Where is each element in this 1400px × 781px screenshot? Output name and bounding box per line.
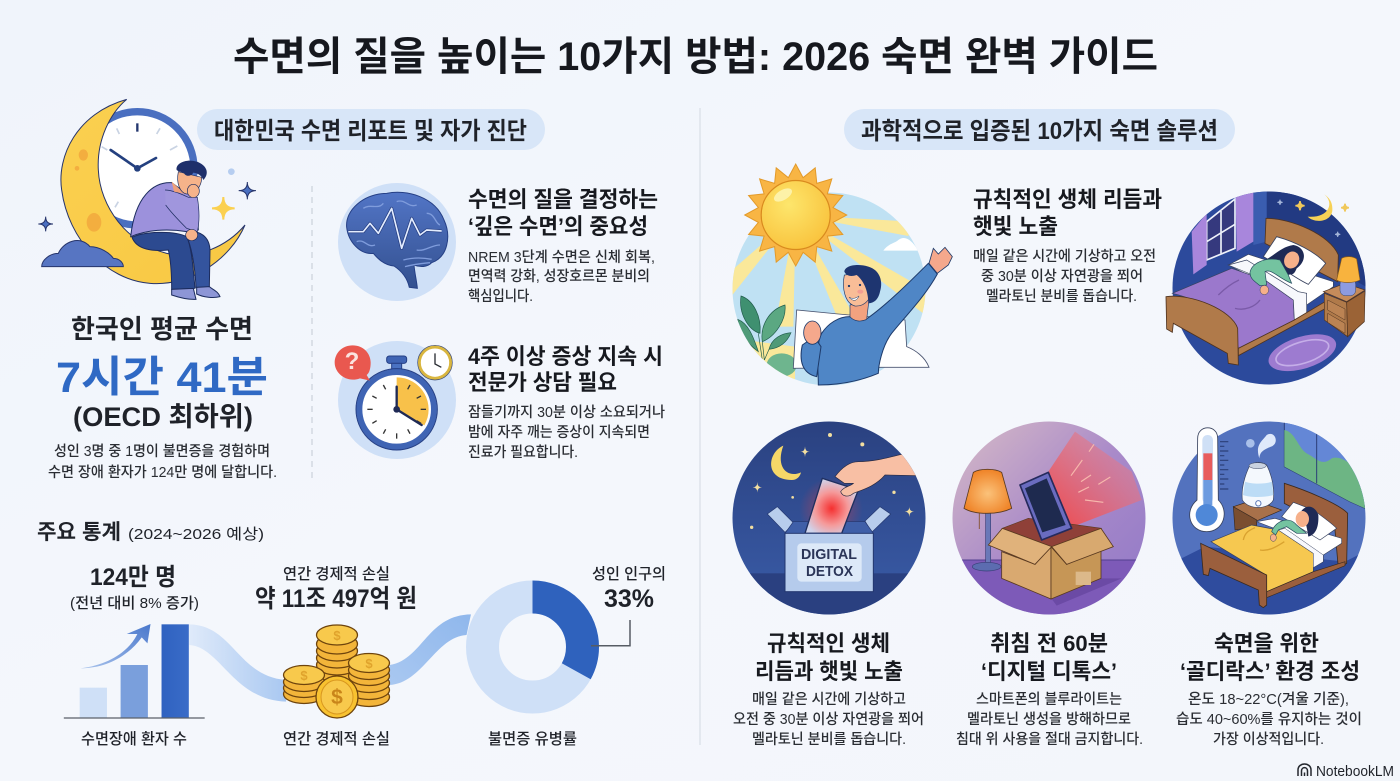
text block: 깊은 수면의 중요성: 수면의 질을 결정하는 <box>468 187 658 212</box>
icon: stacks of gold coins with loss figures: 약 11조 497억 원 <box>255 585 417 613</box>
text block: 골디락스 환경 조성: 습도 40~60%를 유지하는 것이 <box>1176 711 1362 728</box>
connector ribbons <box>189 614 471 702</box>
icon: stacks of gold coins with loss figures: $ <box>331 686 343 709</box>
text block: 전문가 상담 필요: 진료가 필요합니다. <box>468 444 578 461</box>
heading: 주요 통계 <box>37 521 264 544</box>
text block: 골디락스 환경 조성: 숙면을 위한 <box>1214 631 1319 656</box>
icon: phone into digital detox box: DETOX <box>806 563 853 580</box>
icon: stacks of gold coins with loss figures: 연간 경제적 손실 <box>283 565 390 583</box>
panel heading: 10가지 숙면 솔루션: 과학적으로 입증된 10가지 숙면 솔루션 <box>861 118 1218 145</box>
text block: 규칙적인 생체 리듬과 햇빛 노출 (하단): 리듬과 햇빛 노출 <box>755 659 903 684</box>
text block: 평균 수면 시간: 성인 3명 중 1명이 불면증을 경험하며 <box>54 443 270 460</box>
text block: 깊은 수면의 중요성: NREM 3단계 수면은 신체 회복, <box>468 249 655 266</box>
text block: 전문가 상담 필요: 4주 이상 증상 지속 시 <box>468 344 663 369</box>
heading: 주요 통계: 주요 통계 <box>37 521 121 544</box>
text block: 골디락스 환경 조성: ‘골디락스’ 환경 조성 <box>1180 659 1360 684</box>
icon: thermometer, humidifier and bed <box>1172 418 1372 622</box>
donut chart: 불면증 유병률 33%: 불면증 유병률 <box>488 730 577 748</box>
icon: phone in cardboard box with lamp <box>952 422 1146 614</box>
text block: 평균 수면 시간: 7시간 41분 <box>56 354 268 402</box>
icon: phone into digital detox box <box>732 422 926 614</box>
text block: 전문가 상담 필요: 밤에 자주 깨는 증상이 지속되면 <box>468 424 650 441</box>
text block: 전문가 상담 필요: 전문가 상담 필요 <box>468 370 617 395</box>
donut chart: 불면증 유병률 33%: 성인 인구의 <box>592 565 666 583</box>
icon: stacks of gold coins with loss figures: $ <box>300 668 308 683</box>
text block: 규칙적인 생체 리듬과 햇빛 노출: 멜라토닌 분비를 돕습니다. <box>986 288 1137 305</box>
text block: 골디락스 환경 조성: 온도 18~22°C(겨울 기준), <box>1188 691 1349 708</box>
text block: 평균 수면 시간: (OECD 최하위) <box>73 402 253 432</box>
text block: 깊은 수면의 중요성 <box>468 187 658 305</box>
donut chart: 불면증 유병률 33% <box>482 565 666 748</box>
bar chart: 수면장애 환자 수 <box>64 564 205 748</box>
logo: NotebookLM: NotebookLM <box>1316 763 1394 780</box>
title: 수면의 질을 높이는 10가지 방법: 2026 숙면 완벽 가이드 <box>233 35 1158 79</box>
text block: 평균 수면 시간 <box>48 314 277 481</box>
text block: 골디락스 환경 조성: 가장 이상적입니다. <box>1213 731 1324 748</box>
text block: 규칙적인 생체 리듬과 햇빛 노출: 중 30분 이상 자연광을 쬐어 <box>981 268 1143 285</box>
text block: 평균 수면 시간: 수면 장애 환자가 124만 명에 달합니다. <box>48 464 277 481</box>
panel heading: 대한민국 수면 리포트 <box>197 109 545 150</box>
panel heading: 대한민국 수면 리포트: 대한민국 수면 리포트 및 자가 진단 <box>214 118 527 145</box>
icon: stacks of gold coins with loss figures: $ <box>333 628 341 643</box>
text block: 규칙적인 생체 리듬과 햇빛 노출: 햇빛 노출 <box>973 214 1058 239</box>
panel heading: 10가지 숙면 솔루션 <box>844 109 1235 150</box>
text block: 규칙적인 생체 리듬과 햇빛 노출 (하단): 멜라토닌 분비를 돕습니다. <box>752 731 906 748</box>
text block: 디지털 디톡스: 멜라토닌 생성을 방해하므로 <box>967 711 1131 728</box>
bar chart: 수면장애 환자 수: 124만 명 <box>90 564 176 591</box>
text block: 규칙적인 생체 리듬과 햇빛 노출 (하단) <box>733 631 924 748</box>
text block: 규칙적인 생체 리듬과 햇빛 노출 <box>973 187 1162 305</box>
text block: 깊은 수면의 중요성: 핵심입니다. <box>468 288 533 305</box>
text block: 규칙적인 생체 리듬과 햇빛 노출 (하단): 매일 같은 시간에 기상하고 <box>752 691 906 708</box>
bar chart: 수면장애 환자 수: 수면장애 환자 수 <box>81 730 187 748</box>
icon: stopwatch with question bubble: ? <box>345 348 359 375</box>
text block: 디지털 디톡스: ‘디지털 디톡스’ <box>981 659 1117 684</box>
donut chart: 불면증 유병률 33%: 33% <box>604 585 654 613</box>
icon: crescent moon with clock and tired man <box>38 99 256 299</box>
text block: 전문가 상담 필요 <box>468 344 665 461</box>
icon: stopwatch with question bubble <box>335 341 456 459</box>
text block: 규칙적인 생체 리듬과 햇빛 노출 (하단): 오전 중 30분 이상 자연광을 쬐어 <box>733 711 924 728</box>
text block: 규칙적인 생체 리듬과 햇빛 노출 (하단): 규칙적인 생체 <box>767 631 890 656</box>
heading: 주요 통계: (2024~2026 예상) <box>128 526 264 543</box>
icon: stacks of gold coins with loss figures: 연간 경제적 손실 <box>283 730 390 748</box>
icon: sun and man stretching <box>728 164 952 390</box>
text block: 디지털 디톡스: 침대 위 사용을 절대 금지합니다. <box>956 731 1143 748</box>
text block: 디지털 디톡스: 취침 전 60분 <box>990 631 1108 656</box>
text block: 깊은 수면의 중요성: 면역력 강화, 성장호르몬 분비의 <box>468 268 650 285</box>
bar chart: 수면장애 환자 수: (전년 대비 8% 증가) <box>70 595 199 612</box>
text block: 평균 수면 시간: 한국인 평균 수면 <box>71 314 253 344</box>
icon: phone into digital detox box: DIGITAL <box>801 546 857 563</box>
icon: brain with sleep wave <box>338 183 456 301</box>
text block: 골디락스 환경 조성 <box>1176 631 1362 748</box>
text block: 디지털 디톡스 <box>956 631 1143 748</box>
text block: 규칙적인 생체 리듬과 햇빛 노출: 매일 같은 시간에 기상하고 오전 <box>973 248 1156 265</box>
text block: 전문가 상담 필요: 잠들기까지 30분 이상 소요되거나 <box>468 404 665 421</box>
text block: 디지털 디톡스: 스마트폰의 블루라이트는 <box>976 691 1122 708</box>
text block: 규칙적인 생체 리듬과 햇빛 노출: 규칙적인 생체 리듬과 <box>973 187 1162 212</box>
icon: stacks of gold coins with loss figures <box>255 565 417 748</box>
icon: stacks of gold coins with loss figures: $ <box>365 656 373 671</box>
text block: 깊은 수면의 중요성: ‘깊은 수면’의 중요성 <box>468 214 648 239</box>
icon: sleeping woman in bedroom <box>1166 185 1375 385</box>
